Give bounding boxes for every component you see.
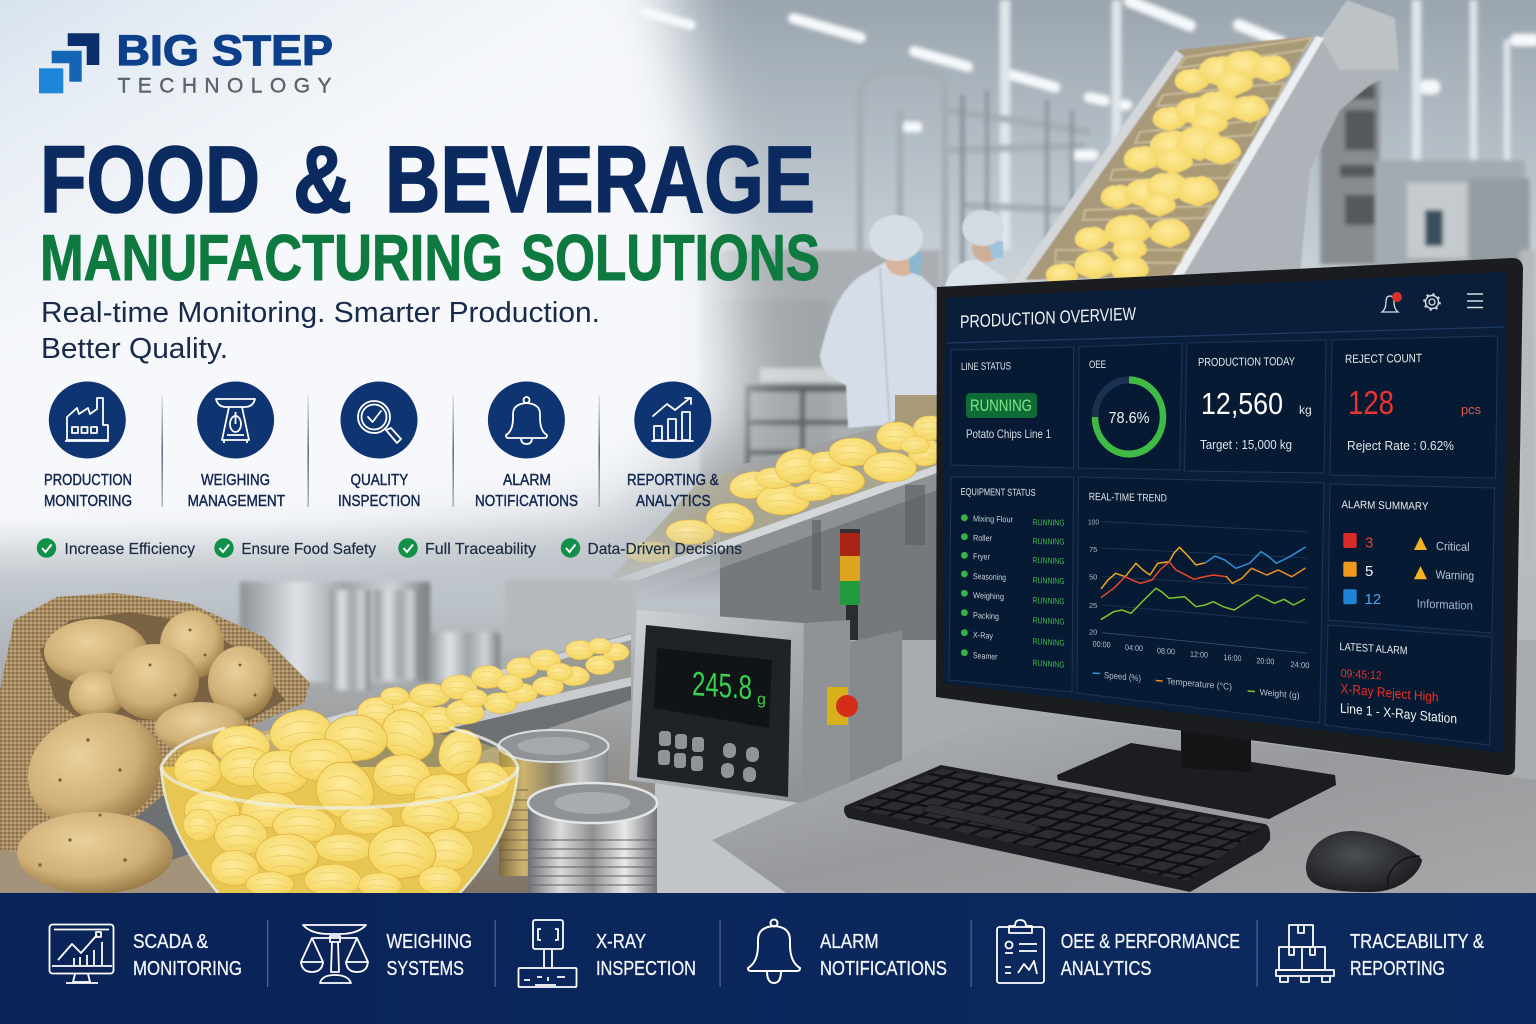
feature: alarm notifications: ALARM bbox=[503, 472, 551, 489]
panel: latest alarm: X-Ray Reject High bbox=[1340, 681, 1438, 705]
subtitle heading: MANUFACTURING bbox=[40, 221, 503, 294]
weight display: 245.8 bbox=[692, 665, 752, 707]
footer item: weighing systems: SYSTEMS bbox=[386, 958, 464, 980]
misty white fade over the left side bbox=[0, 0, 740, 580]
panel: alarm summary: Critical bbox=[1436, 539, 1470, 554]
panel: latest alarm: 09:45:12 bbox=[1341, 668, 1382, 682]
footer item: traceability and reporting: TRACEABILITY & bbox=[1350, 931, 1485, 953]
tagline: Better Quality. bbox=[41, 333, 228, 365]
footer item: traceability and reporting bbox=[1276, 925, 1485, 982]
panel: equipment status: RUNNING bbox=[1033, 555, 1065, 566]
tagline: Real-time Monitoring. Smarter Production. bbox=[41, 297, 600, 329]
panel: equipment status: Fryer bbox=[973, 551, 990, 562]
panel: line status: Potato Chips Line 1 bbox=[966, 427, 1051, 441]
panel: equipment status: RUNNING bbox=[1033, 615, 1065, 627]
panel: equipment status: Roller bbox=[973, 533, 992, 543]
icon: settings gear bbox=[1424, 294, 1440, 310]
feature: weighing management bbox=[188, 382, 285, 510]
weight display: g bbox=[757, 691, 766, 709]
footer item: SCADA and monitoring: MONITORING bbox=[133, 958, 242, 980]
stack light bbox=[840, 529, 860, 640]
panel: alarm summary: Information bbox=[1417, 597, 1473, 613]
benefit: ensure food safety: Ensure Food Safety bbox=[241, 541, 376, 558]
monitor bbox=[936, 258, 1523, 775]
lower conveyor with chips bbox=[109, 633, 631, 880]
panel: latest alarm: Line 1 - X-Ray Station bbox=[1340, 701, 1457, 726]
footer item: alarm notifications: NOTIFICATIONS bbox=[820, 958, 947, 980]
checkweigher cabinet bbox=[629, 610, 902, 803]
title: BEVERAGE bbox=[385, 127, 815, 233]
panel: equipment status: Seasoning bbox=[973, 571, 1006, 582]
logo tagline: TECHNOLOGY bbox=[118, 75, 332, 98]
benefit: increase efficiency: Increase Efficiency bbox=[64, 541, 195, 558]
panel: real-time trend chart: 04:00 bbox=[1125, 643, 1143, 653]
footer item: X-ray inspection bbox=[518, 920, 696, 987]
panel: equipment status: Seamer bbox=[973, 650, 998, 662]
footer item: SCADA and monitoring: SCADA & bbox=[133, 931, 209, 953]
feature: production monitoring: PRODUCTION bbox=[44, 472, 132, 489]
panel: equipment status: RUNNING bbox=[1033, 636, 1065, 648]
panel: line status: RUNNING bbox=[970, 396, 1032, 415]
footer band bbox=[0, 893, 1536, 1024]
inclined chip conveyor bbox=[1013, 0, 1399, 287]
subtitle heading: SOLUTIONS bbox=[521, 221, 820, 294]
panel: equipment status: EQUIPMENT STATUS bbox=[961, 487, 1036, 499]
panel: alarm summary: 3 bbox=[1365, 534, 1373, 552]
panel: production today: kg bbox=[1299, 403, 1312, 417]
benefit: ensure food safety bbox=[214, 538, 376, 558]
logo mark: ascending steps bbox=[39, 33, 99, 93]
mouse bbox=[1306, 831, 1422, 892]
feature: production monitoring: MONITORING bbox=[44, 493, 132, 510]
feature: quality inspection bbox=[338, 382, 420, 510]
footer item: weighing systems: WEIGHING bbox=[386, 931, 472, 953]
keypad bbox=[658, 731, 759, 782]
panel: production today: Target : 15,000 kg bbox=[1200, 438, 1292, 452]
feature icons row bbox=[44, 382, 719, 510]
benefit: data-driven decisions: Data-Driven Decisions bbox=[588, 541, 742, 558]
keyboard bbox=[844, 765, 1270, 892]
glass rim bbox=[161, 728, 518, 893]
lower left background: tanks and table bbox=[0, 520, 720, 893]
front can bbox=[528, 783, 657, 893]
panel: latest alarm: LATEST ALARM bbox=[1340, 641, 1408, 657]
benefit: full traceability bbox=[398, 538, 536, 558]
emergency stop bbox=[827, 687, 858, 725]
panel: real-time trend chart: 100 bbox=[1088, 518, 1099, 526]
feature: quality inspection: INSPECTION bbox=[338, 493, 420, 510]
panel: real-time trend chart: 25 bbox=[1089, 601, 1097, 610]
weight display bbox=[654, 648, 772, 728]
panel: real-time trend chart: 00:00 bbox=[1093, 640, 1111, 650]
panel: real-time trend chart: REAL-TIME TREND bbox=[1089, 491, 1167, 505]
panel: reject count: Reject Rate : 0.62% bbox=[1347, 438, 1454, 453]
footer item: OEE and performance analytics: ANALYTICS bbox=[1061, 958, 1152, 980]
panel: latest alarm bbox=[1325, 625, 1492, 745]
panel: alarm summary: 5 bbox=[1365, 563, 1373, 580]
feature: reporting and analytics: REPORTING & bbox=[627, 472, 719, 489]
feature: weighing management: MANAGEMENT bbox=[188, 493, 285, 510]
panel: real-time trend chart bbox=[1077, 477, 1324, 723]
panel: equipment status: RUNNING bbox=[1033, 575, 1065, 586]
panel: real-time trend chart: 12:00 bbox=[1190, 650, 1208, 660]
panel: production today: PRODUCTION TODAY bbox=[1198, 356, 1295, 369]
feature: weighing management: WEIGHING bbox=[201, 472, 270, 489]
floor and steel table bbox=[655, 640, 1536, 893]
panel: production today bbox=[1184, 340, 1326, 473]
tagline bbox=[41, 297, 600, 365]
panel: equipment status: Mixing Flour bbox=[973, 514, 1013, 524]
title: FOOD bbox=[40, 127, 260, 233]
icon: menu bbox=[1467, 294, 1483, 308]
panel: real-time trend chart: Temperature (°C) bbox=[1166, 676, 1232, 692]
rear can bbox=[498, 730, 608, 876]
panel: equipment status: Weighing bbox=[973, 590, 1004, 602]
panel: line status bbox=[951, 347, 1074, 468]
panel: alarm summary: 12 bbox=[1364, 591, 1381, 608]
panel: real-time trend chart: 75 bbox=[1089, 545, 1097, 554]
panel: reject count: 128 bbox=[1348, 384, 1394, 421]
panel: reject count: REJECT COUNT bbox=[1345, 351, 1423, 366]
glass bowl of chips bbox=[161, 702, 518, 897]
panel: line status: LINE STATUS bbox=[961, 360, 1011, 373]
monitor stand bbox=[1057, 720, 1336, 819]
panel: equipment status bbox=[949, 477, 1074, 692]
panel: real-time trend chart: 08:00 bbox=[1157, 646, 1175, 656]
panel: alarm summary: ALARM SUMMARY bbox=[1341, 499, 1429, 513]
footer item: weighing systems bbox=[301, 925, 472, 983]
panel: reject count: pcs bbox=[1461, 402, 1481, 417]
footer item: X-ray inspection: INSPECTION bbox=[596, 958, 696, 980]
blurred factory hall: ceiling, lights, pipes and frames bbox=[620, 0, 1536, 810]
worker in hygiene coat, front bbox=[820, 215, 938, 428]
feature: reporting and analytics bbox=[627, 382, 719, 510]
logo wordmark: BIG STEP bbox=[116, 27, 333, 75]
panel: reject count bbox=[1330, 336, 1498, 478]
feature: quality inspection: QUALITY bbox=[350, 472, 408, 489]
panel: equipment status: X-Ray bbox=[973, 630, 994, 641]
icon: notification bell bbox=[1382, 292, 1402, 312]
panel: equipment status: Packing bbox=[973, 610, 999, 621]
feature: alarm notifications: NOTIFICATIONS bbox=[475, 493, 578, 510]
metal cans bbox=[498, 730, 657, 893]
panel: real-time trend chart: Speed (%) bbox=[1104, 670, 1141, 683]
panel: OEE gauge: OEE bbox=[1089, 359, 1106, 371]
title bbox=[40, 127, 815, 233]
benefit checklist bbox=[37, 538, 742, 558]
footer item: alarm notifications: ALARM bbox=[820, 931, 878, 953]
footer item: alarm notifications bbox=[748, 920, 947, 983]
brand logo bbox=[39, 27, 333, 98]
benefit: increase efficiency bbox=[37, 538, 195, 558]
feature: alarm notifications bbox=[475, 382, 578, 510]
panel: real-time trend chart: 20 bbox=[1089, 628, 1097, 637]
footer item: OEE and performance analytics: OEE & PERFORMANCE bbox=[1061, 931, 1240, 953]
panel: real-time trend chart: Weight (g) bbox=[1260, 687, 1300, 701]
panel: production today: 12,560 bbox=[1201, 386, 1283, 421]
worker in hygiene coat, rear bbox=[945, 210, 1008, 290]
title: & bbox=[293, 127, 352, 233]
burlap sack of potatoes bbox=[0, 593, 310, 894]
panel: alarm summary bbox=[1328, 484, 1494, 633]
dashboard heading: PRODUCTION OVERVIEW bbox=[960, 304, 1136, 332]
panel: real-time trend chart: 24:00 bbox=[1290, 660, 1310, 670]
panel: equipment status: RUNNING bbox=[1033, 536, 1065, 547]
footer item: X-ray inspection: X-RAY bbox=[596, 931, 646, 953]
panel: equipment status: RUNNING bbox=[1033, 658, 1065, 670]
feature: reporting and analytics: ANALYTICS bbox=[636, 493, 711, 510]
panel: real-time trend chart: 20:00 bbox=[1256, 656, 1275, 666]
panel: equipment status: RUNNING bbox=[1033, 517, 1065, 528]
panel: real-time trend chart: 16:00 bbox=[1224, 653, 1242, 663]
chips bbox=[174, 702, 510, 897]
footer item: SCADA and monitoring bbox=[50, 924, 242, 983]
feature: production monitoring bbox=[44, 382, 132, 510]
panel: alarm summary: Warning bbox=[1436, 568, 1474, 583]
panel: OEE gauge: 78.6% bbox=[1108, 410, 1150, 427]
panel: real-time trend chart: 50 bbox=[1089, 573, 1097, 582]
footer item: OEE and performance analytics bbox=[997, 920, 1240, 983]
middle conveyor with chips bbox=[600, 395, 947, 690]
benefit: full traceability: Full Traceability bbox=[425, 541, 536, 558]
footer item: traceability and reporting: REPORTING bbox=[1350, 958, 1445, 980]
panel: equipment status: RUNNING bbox=[1033, 595, 1065, 606]
potatoes bbox=[13, 611, 274, 894]
panel: OEE gauge bbox=[1078, 343, 1182, 470]
